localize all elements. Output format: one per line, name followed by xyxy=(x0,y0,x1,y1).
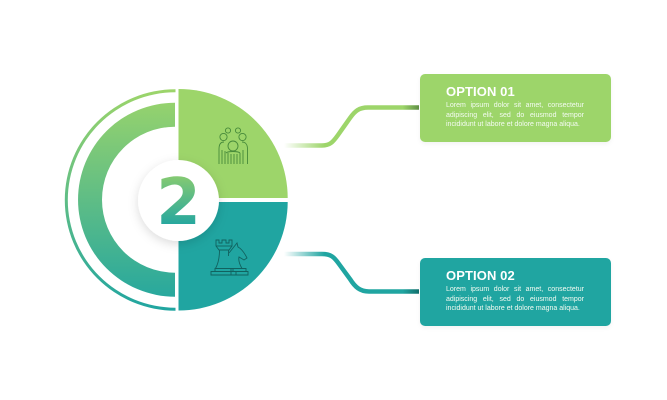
connector 1 xyxy=(284,108,419,146)
panel: option 02 xyxy=(420,258,610,326)
outer thin arc xyxy=(65,89,176,311)
quadrant: green xyxy=(178,89,288,198)
quadrant: teal xyxy=(178,202,288,311)
heading: option 01: OPTION 01 xyxy=(446,84,515,98)
icon: chess pieces xyxy=(211,240,248,275)
centre circle xyxy=(138,160,219,241)
connector 2 xyxy=(284,254,419,292)
text block: option 01: Lorem ipsum dolor sit amet, consectetur adipiscing elit, sed do eiusmod tempor incididunt ut labore et dolore magna aliqua. xyxy=(446,102,584,128)
heading: option 02: OPTION 02 xyxy=(446,268,515,282)
panel: option 01 xyxy=(420,74,610,142)
number 2: 2 xyxy=(156,166,201,240)
icon: people group xyxy=(219,128,248,164)
thick arc xyxy=(78,103,175,297)
text block: option 02: Lorem ipsum dolor sit amet, consectetur adipiscing elit, sed do eiusmod tempor incididunt ut labore et dolore magna aliqua. xyxy=(446,286,584,312)
